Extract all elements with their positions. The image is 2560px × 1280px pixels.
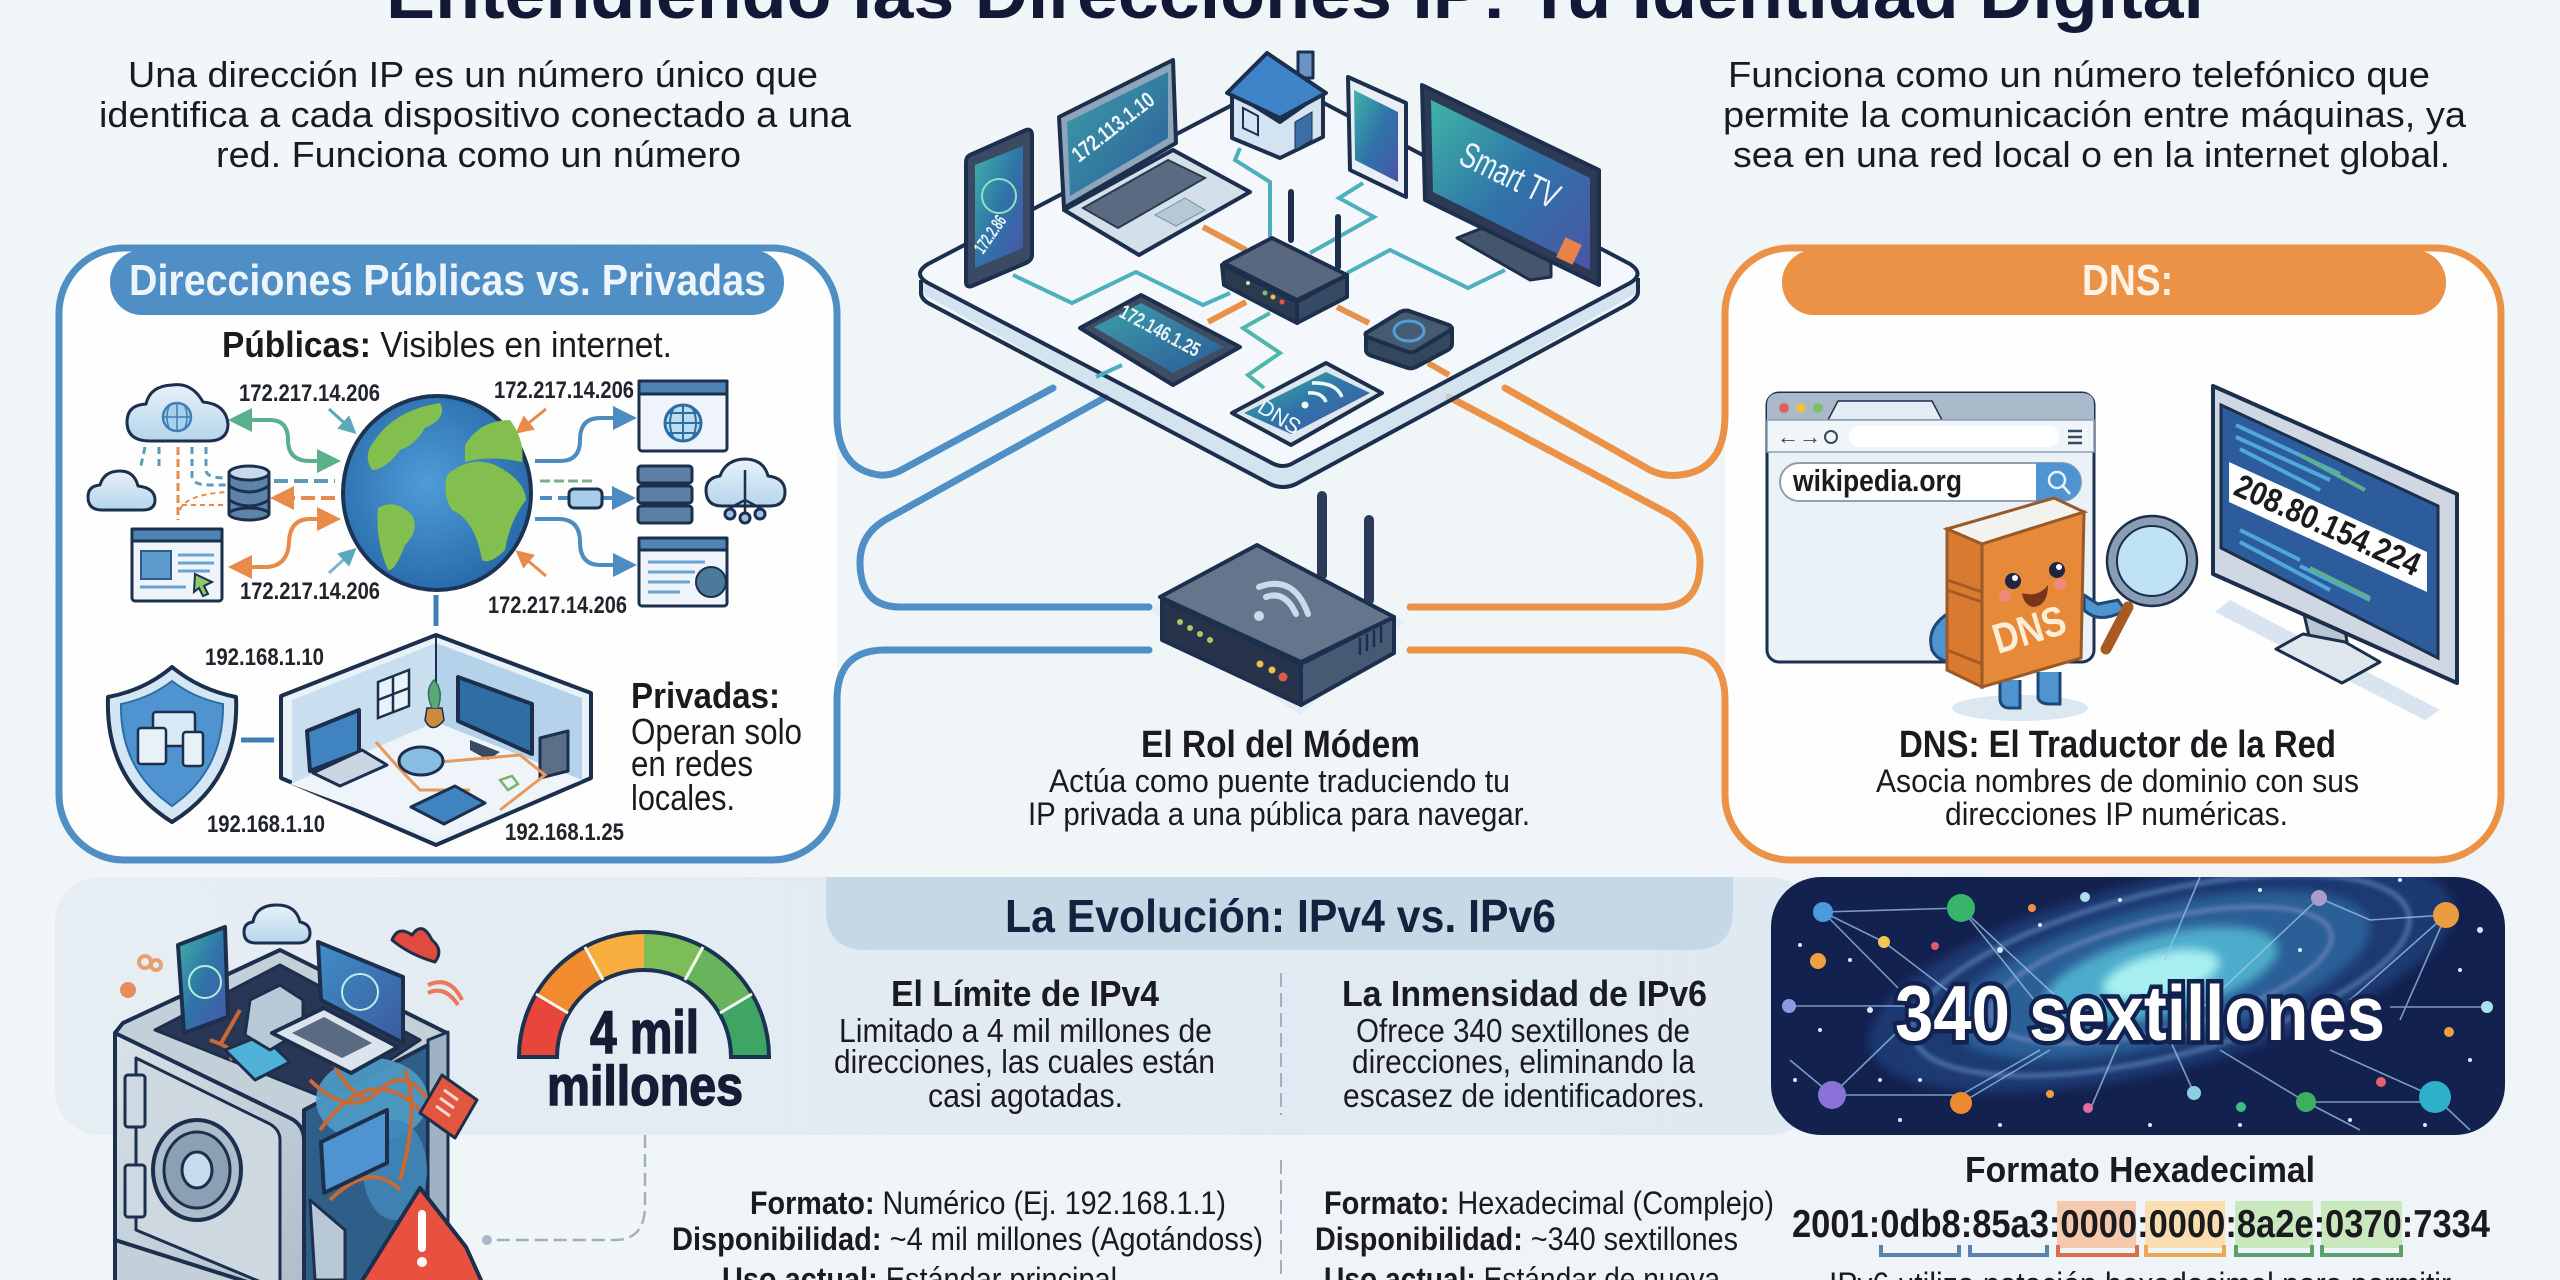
private IP labels xyxy=(205,644,624,846)
network traces xyxy=(1013,148,1505,388)
DNS description: direcciones IP numéricas. xyxy=(1945,796,2288,832)
IPv4 description xyxy=(834,973,1215,1114)
comparison list IPv4 xyxy=(672,1185,1263,1280)
DNS description xyxy=(1876,724,2359,832)
formato hexadecimal xyxy=(1792,1149,2490,1280)
intro text right xyxy=(1723,54,2467,175)
hex brackets xyxy=(1881,1245,2401,1255)
hex highlights xyxy=(2057,1201,2402,1248)
device: small tablet xyxy=(1080,295,1240,385)
device: phone xyxy=(966,130,1032,286)
public IP labels xyxy=(239,377,634,619)
intro text right: permite la comunicación entre máquinas, ya xyxy=(1723,94,2467,135)
public IP labels: 172.217.14.206 xyxy=(488,592,627,619)
panel: DNS xyxy=(1410,248,2501,860)
device: smart TV xyxy=(1422,85,1599,285)
intro text right: Funciona como un número telefónico que xyxy=(1728,54,2430,95)
IPv6 description: escasez de identificadores. xyxy=(1343,1077,1705,1114)
comparison list IPv6: Disponibilidad: ~340 sextillones xyxy=(1315,1221,1738,1257)
modem description: IP privada a una pública para navegar. xyxy=(1028,796,1530,832)
device: router xyxy=(1222,192,1347,323)
icon: database xyxy=(229,466,269,520)
gauge: 4 mil millones xyxy=(519,932,769,1117)
browser window xyxy=(1767,393,2094,662)
search box xyxy=(1780,463,2081,501)
cloud xyxy=(244,905,310,943)
comparison list IPv6: Formato: Hexadecimal (Complejo) xyxy=(1324,1185,1774,1221)
privadas text: Operan solo xyxy=(631,711,802,752)
IPv6 description: La Inmensidad de IPv6 xyxy=(1342,973,1707,1014)
icon: cloud with nodes xyxy=(706,459,785,523)
public IP labels: 172.217.14.206 xyxy=(240,578,380,605)
icon: DNS book mascot xyxy=(1931,498,2197,721)
IPv4 description: El Límite de IPv4 xyxy=(891,973,1159,1014)
IPv6 description: Ofrece 340 sextillones de xyxy=(1356,1012,1690,1049)
intro text left xyxy=(99,54,852,175)
intro text left: identifica a cada dispositivo conectado a una xyxy=(99,94,852,135)
search box: wikipedia.org xyxy=(1792,463,1962,498)
heading pill: Direcciones Públicas vs. Privadas xyxy=(129,256,766,305)
IPv4 description: Limitado a 4 mil millones de xyxy=(839,1012,1212,1049)
privadas text: en redes xyxy=(631,743,753,784)
nodes xyxy=(1813,902,1833,922)
IPv4 description: direcciones, las cuales están xyxy=(834,1043,1215,1080)
browser window: ←→ xyxy=(1777,424,1821,449)
red cloud xyxy=(392,929,439,962)
red card xyxy=(420,1075,477,1138)
warning triangle xyxy=(350,1188,490,1280)
icon: device node xyxy=(569,489,602,508)
icon: monitor showing IP xyxy=(2213,386,2457,720)
comparison list IPv6 xyxy=(1315,1185,1774,1280)
icon: central modem xyxy=(1150,496,1405,715)
heading pill: DNS: xyxy=(2082,256,2173,305)
private IP labels: 192.168.1.25 xyxy=(505,819,624,846)
heading pill xyxy=(110,250,784,315)
orange dots xyxy=(120,982,136,998)
formato hexadecimal: 2001:0db8:85a3:0000:0000:8a2e:0370:7334 xyxy=(1792,1203,2490,1246)
icon: isometric room xyxy=(281,635,591,845)
públicas label: Públicas: Visibles en internet. xyxy=(222,324,672,365)
panel border and connector lines xyxy=(1410,248,2501,860)
intro text left: red. Funciona como un número xyxy=(216,134,741,175)
comparison list IPv4: Disponibilidad: ~4 mil millones (Agotándoss) xyxy=(672,1221,1263,1257)
dial xyxy=(153,1120,241,1220)
laptop xyxy=(318,942,403,1043)
galaxy spiral xyxy=(1866,877,2456,1096)
device: tablet xyxy=(1348,77,1406,197)
icon: overflowing safe xyxy=(115,905,490,1280)
comparison list IPv4: Formato: Numérico (Ej. 192.168.1.1) xyxy=(750,1185,1226,1221)
icon: browser with cursor xyxy=(132,529,222,601)
intro text right: sea en una red local o en la internet global. xyxy=(1733,134,2450,175)
device: phone: 172.2.86 xyxy=(970,211,1010,257)
gauge: 4 mil millones: millones xyxy=(547,1054,743,1117)
panel: direcciones públicas vs privadas xyxy=(59,248,1149,860)
device: smart TV: Smart TV xyxy=(1453,133,1567,217)
wifi arcs xyxy=(428,982,462,1005)
panel: evolución band xyxy=(55,877,1815,1135)
IPv4 description: casi agotadas. xyxy=(928,1077,1123,1114)
panel: galaxy 340 sextillones xyxy=(1771,877,2505,1135)
privadas text: Privadas: xyxy=(631,675,780,716)
icon: monitor showing IP: 208.80.154.224 xyxy=(2229,467,2427,583)
gauge: 4 mil millones: 4 mil xyxy=(590,999,699,1066)
formato hexadecimal: Formato Hexadecimal xyxy=(1965,1149,2315,1190)
phone xyxy=(178,927,228,1033)
heading pill xyxy=(1782,250,2446,315)
DNS description: Asocia nombres de dominio con sus xyxy=(1876,763,2359,799)
private IP labels: 192.168.1.10 xyxy=(205,644,324,671)
device: house xyxy=(1227,52,1326,158)
icon: globe xyxy=(343,396,531,590)
stars xyxy=(1793,878,2483,1127)
DNS description: DNS: El Traductor de la Red xyxy=(1899,724,2336,766)
icon: small cloud xyxy=(88,471,155,510)
modem description: El Rol del Módem xyxy=(1141,724,1420,766)
illustration: isometric home network platform xyxy=(920,52,1638,489)
device: laptop: 172.113.1.10 xyxy=(1067,87,1159,167)
heading: la evolución xyxy=(826,877,1733,950)
panel border and connector lines xyxy=(59,248,1149,860)
icon: browser with data xyxy=(639,538,727,606)
privadas text: locales. xyxy=(631,777,735,818)
intro text left: Una dirección IP es un número único que xyxy=(128,54,818,95)
device: small tablet: 172.146.1.25 xyxy=(1116,301,1204,362)
device: laptop xyxy=(1059,60,1250,255)
icon: cloud with globe xyxy=(127,385,228,441)
IPv6 description xyxy=(1342,973,1707,1114)
big number: 340 sextillones xyxy=(1895,969,2385,1057)
heading: la evolución: La Evolución: IPv4 vs. IPv6 xyxy=(1005,890,1556,942)
privadas text xyxy=(631,675,802,818)
open side with cables xyxy=(304,1045,428,1280)
network lines xyxy=(1789,877,2487,1130)
icon: shield xyxy=(108,667,274,822)
device: DNS phone: DNS xyxy=(1253,394,1306,440)
icon: browser with globe xyxy=(639,381,727,451)
icon: server rack xyxy=(638,466,692,523)
icon: DNS book mascot: DNS xyxy=(1987,596,2071,663)
connection arrows xyxy=(140,409,629,626)
modem description xyxy=(1028,724,1530,832)
IPv6 description: direcciones, eliminando la xyxy=(1352,1043,1696,1080)
device: DNS phone xyxy=(1232,363,1382,445)
public IP labels: 172.217.14.206 xyxy=(494,377,634,404)
cables and inner devices xyxy=(210,1010,440,1200)
device: hub xyxy=(1366,310,1452,368)
private IP labels: 192.168.1.10 xyxy=(207,811,325,838)
public IP labels: 172.217.14.206 xyxy=(239,380,380,407)
modem description: Actúa como puente traduciendo tu xyxy=(1049,763,1510,799)
